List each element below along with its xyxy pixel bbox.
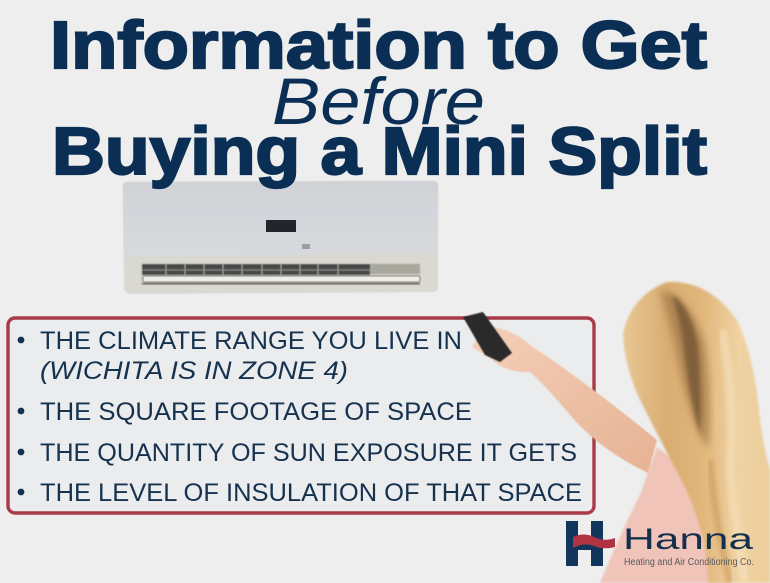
bullet list: (WICHITA IS IN ZONE 4) bbox=[40, 357, 348, 385]
remote control bbox=[463, 312, 512, 362]
AC display bbox=[266, 220, 296, 232]
AC logo bbox=[302, 244, 310, 249]
woman with remote bbox=[463, 282, 770, 583]
bullet list: THE SQUARE FOOTAGE OF SPACE bbox=[40, 398, 472, 426]
title line 1: Information to Get bbox=[50, 8, 707, 83]
pink top bbox=[600, 447, 728, 583]
title line 2: Before bbox=[272, 64, 485, 138]
logo tagline: Heating and Air Conditioning Co. bbox=[624, 557, 754, 568]
title line 3: Buying a Mini Split bbox=[52, 114, 707, 189]
air conditioner unit bbox=[123, 181, 438, 294]
arm and hand bbox=[472, 325, 657, 473]
bullet list: THE LEVEL OF INSULATION OF THAT SPACE bbox=[40, 479, 582, 507]
logo mark bbox=[566, 521, 615, 566]
hair shadow streak bbox=[660, 290, 745, 583]
AC front panel bbox=[123, 181, 438, 257]
bullet list bbox=[18, 327, 582, 507]
bullet list: THE QUANTITY OF SUN EXPOSURE IT GETS bbox=[40, 439, 577, 467]
logo wordmark: Hanna bbox=[623, 523, 753, 556]
AC vent bbox=[141, 263, 420, 285]
title bbox=[50, 8, 707, 189]
hair bbox=[623, 282, 770, 583]
logo: Hanna Heating and Air Conditioning Co. bbox=[566, 521, 754, 568]
panel: information checklist bbox=[8, 318, 594, 513]
bullet list: THE CLIMATE RANGE YOU LIVE IN bbox=[40, 327, 462, 355]
